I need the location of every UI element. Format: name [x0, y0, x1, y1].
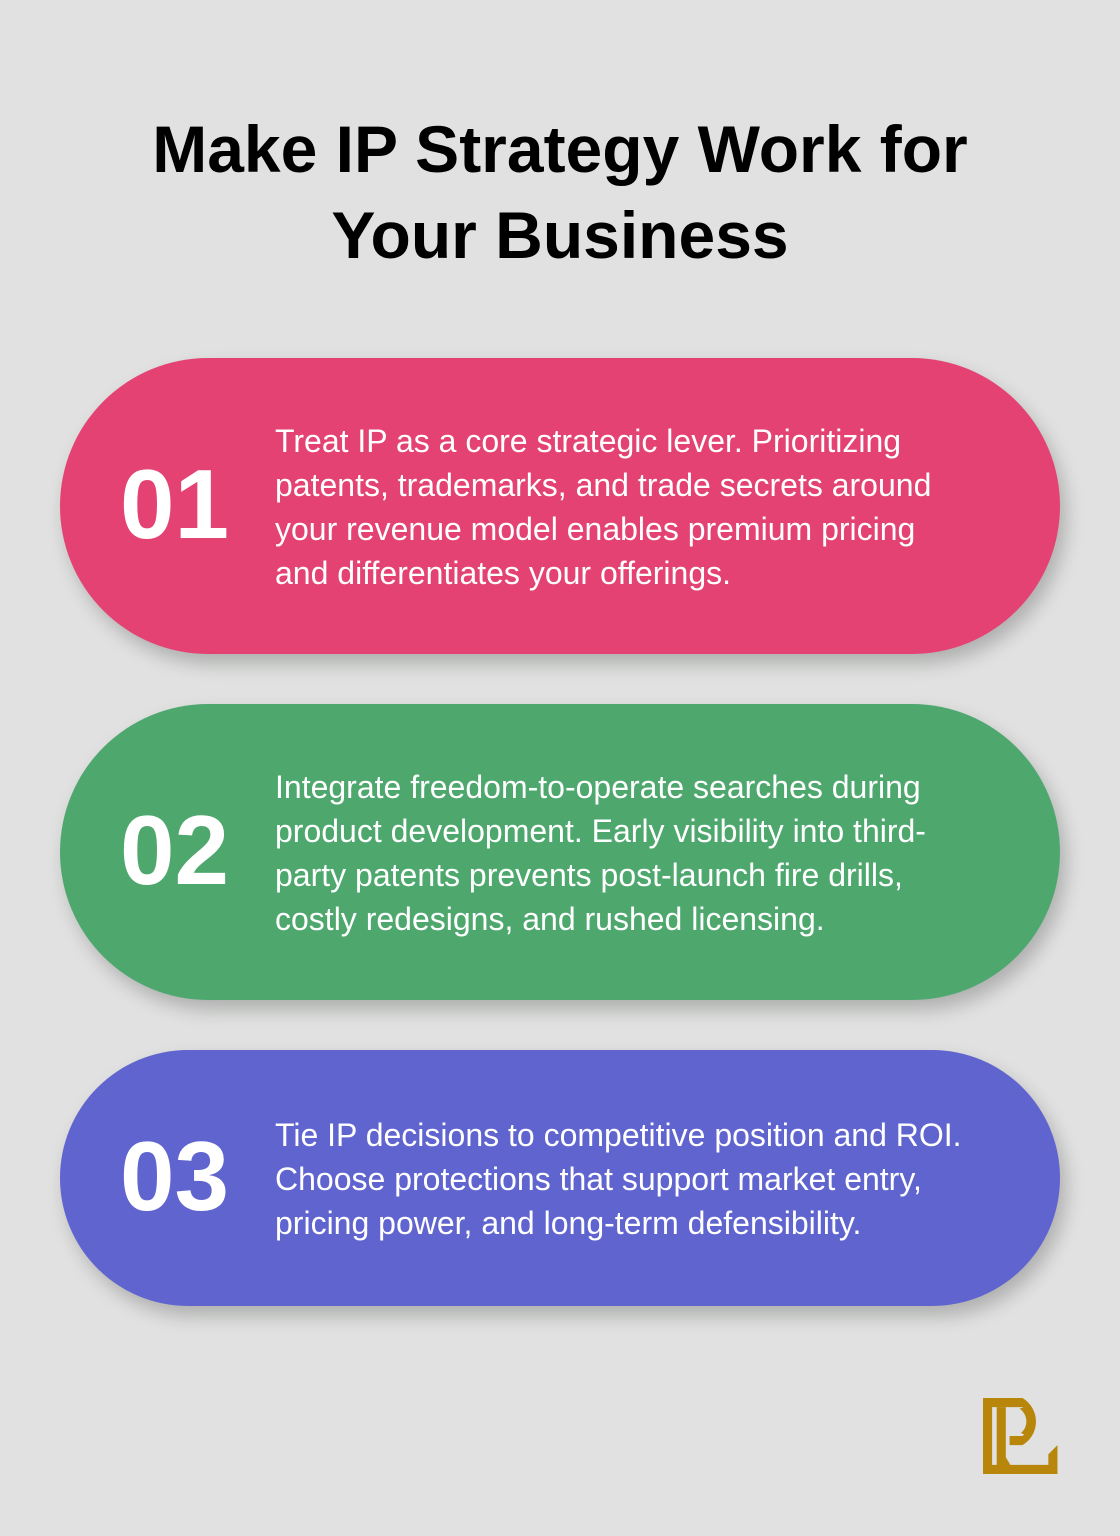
- number 01: 01: [120, 449, 229, 559]
- text 02: [275, 769, 926, 937]
- panel: step 02: [60, 704, 1060, 1000]
- number 02: 02: [120, 795, 229, 905]
- title: Your Business: [331, 198, 789, 272]
- text 01: Treat IP as a core strategic lever. Prioritizing: [275, 423, 901, 459]
- logo: [983, 1398, 1058, 1474]
- text 01: patents, trademarks, and trade secrets around: [275, 467, 931, 503]
- text 02: party patents prevents post-launch fire drills,: [275, 857, 903, 893]
- text 03: [275, 1117, 962, 1241]
- panel: step 01: [60, 358, 1060, 654]
- text 01: your revenue model enables premium pricing: [275, 511, 915, 547]
- text 03: pricing power, and long-term defensibility.: [275, 1205, 861, 1241]
- text 02: product development. Early visibility into third-: [275, 813, 926, 849]
- text 01: and differentiates your offerings.: [275, 555, 731, 591]
- number 03: 03: [120, 1121, 229, 1231]
- text 02: Integrate freedom-to-operate searches during: [275, 769, 921, 805]
- panel: step 03: [60, 1050, 1060, 1306]
- title: [152, 112, 968, 272]
- text 02: costly redesigns, and rushed licensing.: [275, 901, 825, 937]
- title: Make IP Strategy Work for: [152, 112, 968, 186]
- text 01: [275, 423, 931, 591]
- text 03: Tie IP decisions to competitive position and ROI.: [275, 1117, 962, 1153]
- text 03: Choose protections that support market entry,: [275, 1161, 922, 1197]
